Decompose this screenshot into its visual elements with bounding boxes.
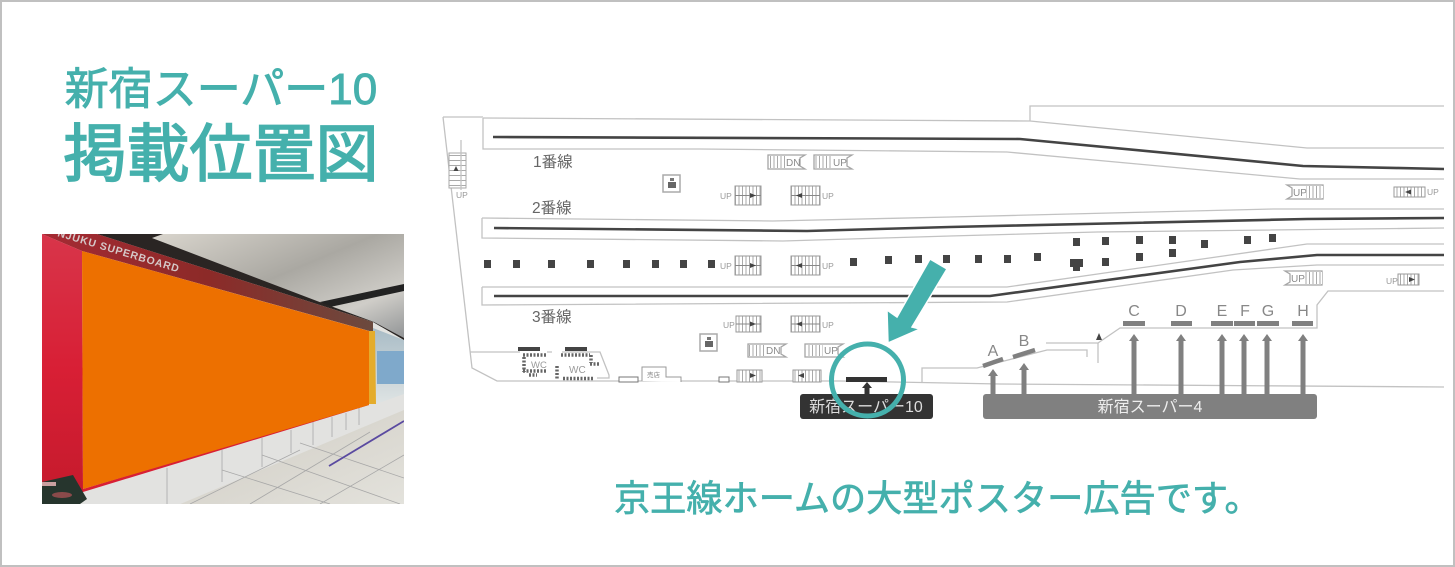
escalators: UP bbox=[824, 346, 838, 357]
location bars A to H: D bbox=[1175, 303, 1187, 320]
location bars A to H: A bbox=[988, 343, 999, 360]
heading: 掲載位置図: 掲載位置図 bbox=[64, 120, 378, 190]
restrooms and shop: 売店 bbox=[647, 370, 660, 379]
location bars A to H: E bbox=[1217, 303, 1227, 320]
arrows up from 新宿スーパー4 bbox=[988, 334, 1308, 396]
location bars A to H: F bbox=[1240, 303, 1250, 320]
position marker: 新宿スーパー10 bbox=[800, 377, 933, 419]
restrooms and shop: WC bbox=[569, 365, 586, 376]
stairs: UP bbox=[1427, 187, 1439, 197]
platform labels: 3番線 bbox=[532, 308, 572, 326]
stairs: UP bbox=[1386, 276, 1398, 286]
stairs: UP bbox=[723, 320, 735, 330]
stairs: UP bbox=[822, 320, 834, 330]
restrooms and shop bbox=[518, 347, 729, 382]
photo: poster position in station corridor bbox=[42, 227, 405, 505]
stairs: UP bbox=[720, 261, 732, 271]
track rails bbox=[493, 137, 1444, 296]
escalators bbox=[748, 155, 1323, 357]
location bars A to H: H bbox=[1297, 303, 1309, 320]
platform outlines bbox=[443, 106, 1444, 387]
platform labels: 2番線 bbox=[532, 199, 572, 217]
stairs: UP bbox=[456, 190, 468, 200]
position marker: 新宿スーパー10: 新宿スーパー10 bbox=[809, 398, 923, 416]
escalators: UP bbox=[833, 158, 847, 169]
location bars A to H: C bbox=[1128, 303, 1140, 320]
label: 新宿スーパー4: 新宿スーパー4 bbox=[1098, 398, 1202, 416]
caption: 京王線ホームの大型ポスター広告です。 bbox=[614, 478, 1261, 519]
stairs: UP bbox=[822, 191, 834, 201]
pillars bbox=[484, 234, 1276, 271]
floor map of platform bbox=[443, 106, 1444, 419]
location bars A to H bbox=[983, 303, 1313, 366]
location bars A to H: B bbox=[1019, 333, 1029, 350]
teal highlight circle bbox=[832, 344, 904, 416]
restrooms and shop: WC bbox=[531, 360, 547, 371]
stairs: UP bbox=[720, 191, 732, 201]
stairs: UP bbox=[822, 261, 834, 271]
escalators: UP bbox=[1293, 188, 1307, 199]
photo sign text: NJUKU SUPERBOARD bbox=[56, 227, 181, 275]
stairs bbox=[449, 140, 1439, 382]
platform labels bbox=[532, 153, 573, 326]
teal pointer arrow bbox=[887, 259, 947, 343]
platform labels: 1番線 bbox=[533, 153, 573, 171]
location bars A to H: G bbox=[1262, 303, 1274, 320]
label: 新宿スーパー4 bbox=[983, 394, 1317, 419]
elevators bbox=[663, 175, 717, 351]
title: 新宿スーパー10: 新宿スーパー10 bbox=[65, 65, 377, 114]
escalators: UP bbox=[1291, 274, 1305, 285]
escalators: DN bbox=[786, 158, 800, 169]
escalators: DN bbox=[766, 346, 780, 357]
